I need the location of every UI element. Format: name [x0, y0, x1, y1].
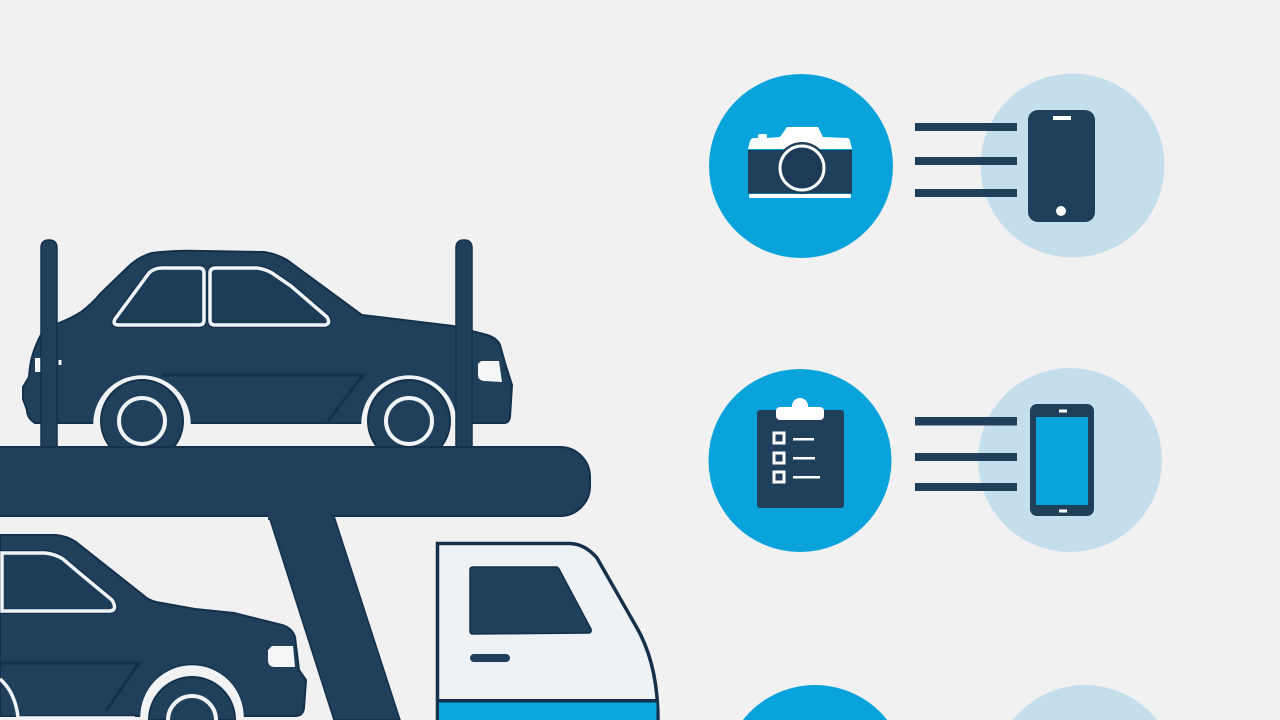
blue circle	[743, 685, 887, 720]
front light	[478, 361, 502, 382]
lower car front wheel	[142, 667, 242, 720]
door handle	[470, 654, 510, 662]
right deck post	[456, 240, 472, 450]
lower car body	[0, 535, 306, 716]
light circle	[1013, 685, 1157, 720]
rear window	[114, 268, 204, 325]
left deck post	[41, 240, 57, 450]
carrier deck	[0, 447, 590, 516]
icon: camera	[748, 127, 852, 198]
small light detail	[58, 360, 62, 365]
row 2: checklist to tablet	[708, 368, 1162, 552]
connector bars	[915, 123, 1017, 197]
cab shell	[438, 544, 658, 720]
cab blue stripe	[439, 702, 656, 720]
car body	[23, 251, 512, 423]
blue circle	[708, 369, 892, 552]
truck cab	[438, 544, 658, 720]
cab window	[470, 567, 591, 634]
blue circle	[709, 74, 893, 258]
lower door crease	[0, 663, 139, 711]
icon: clipboard	[757, 398, 844, 508]
lower car window	[2, 553, 115, 611]
upper car on carrier deck	[23, 251, 512, 462]
light circle	[980, 74, 1164, 258]
front window	[210, 268, 329, 325]
row 3: partially visible circles	[743, 685, 1157, 720]
icon: smartphone	[1028, 110, 1095, 222]
door crease	[162, 375, 363, 421]
lower car	[0, 535, 306, 720]
row 1: camera to phone	[709, 74, 1164, 258]
front wheel	[361, 375, 456, 446]
lower car rear wheel arc	[0, 679, 135, 718]
carrier support strut	[267, 510, 400, 720]
rear wheel	[93, 375, 191, 446]
lower car light	[268, 646, 295, 667]
rear light	[35, 358, 40, 372]
light circle	[978, 368, 1162, 552]
icon: tablet	[1030, 404, 1094, 516]
connector bars	[915, 417, 1017, 491]
